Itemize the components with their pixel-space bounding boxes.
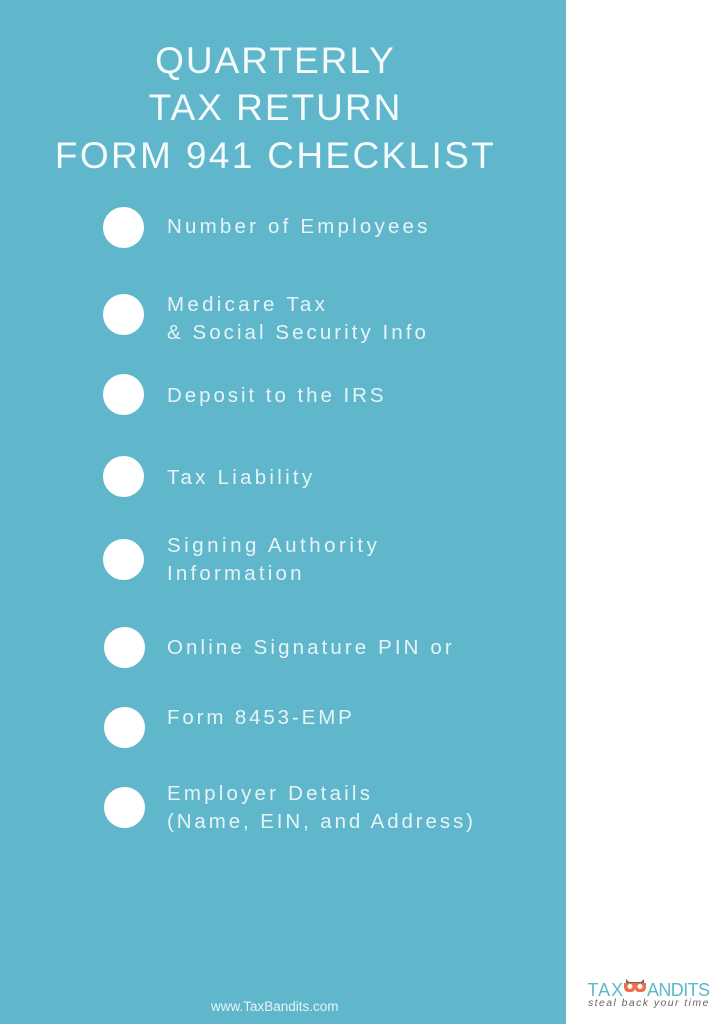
checkbox: medicare tax	[103, 294, 144, 335]
item: form 8453-EMP: Form 8453-EMP	[167, 706, 355, 729]
item: employer details	[167, 782, 476, 833]
title: TAX RETURN	[149, 87, 402, 128]
title: QUARTERLY	[155, 40, 396, 81]
item: medicare tax and social security: & Social Security Info	[167, 321, 429, 344]
website footer: www.TaxBandits.com	[211, 999, 339, 1014]
item: employer details: Employer Details	[167, 782, 373, 805]
item: medicare tax and social security: Medicare Tax	[167, 293, 328, 316]
title	[55, 40, 496, 176]
icon: owl mask	[624, 979, 646, 992]
checkbox: tax liability	[103, 456, 144, 497]
checkbox: online signature	[104, 627, 145, 668]
panel: teal background	[0, 0, 566, 1024]
logo: TaxBandits	[588, 979, 710, 1009]
item: tax liability: Tax Liability	[167, 466, 315, 489]
item: signing authority information: Signing Authority	[167, 534, 380, 557]
checkbox: deposit	[103, 374, 144, 415]
item: medicare tax and social security	[167, 293, 429, 344]
logo wordmark right: ANDITS	[647, 980, 709, 1000]
item: online signature PIN: Online Signature PIN or	[167, 636, 455, 659]
item: employer details: (Name, EIN, and Address)	[167, 810, 476, 833]
logo tagline: steal back your time	[588, 997, 710, 1009]
logo wordmark left: TAX	[588, 980, 624, 1000]
checkbox: form 8453	[104, 707, 145, 748]
item: signing authority information: Information	[167, 562, 305, 585]
item: signing authority information	[167, 534, 380, 585]
item: number of employees: Number of Employees	[167, 215, 431, 238]
checkbox: employer details	[104, 787, 145, 828]
checkbox: signing authority	[103, 539, 144, 580]
item: deposit to the IRS: Deposit to the IRS	[167, 384, 386, 407]
checkbox: number of employees	[103, 207, 144, 248]
title: FORM 941 CHECKLIST	[55, 134, 496, 176]
